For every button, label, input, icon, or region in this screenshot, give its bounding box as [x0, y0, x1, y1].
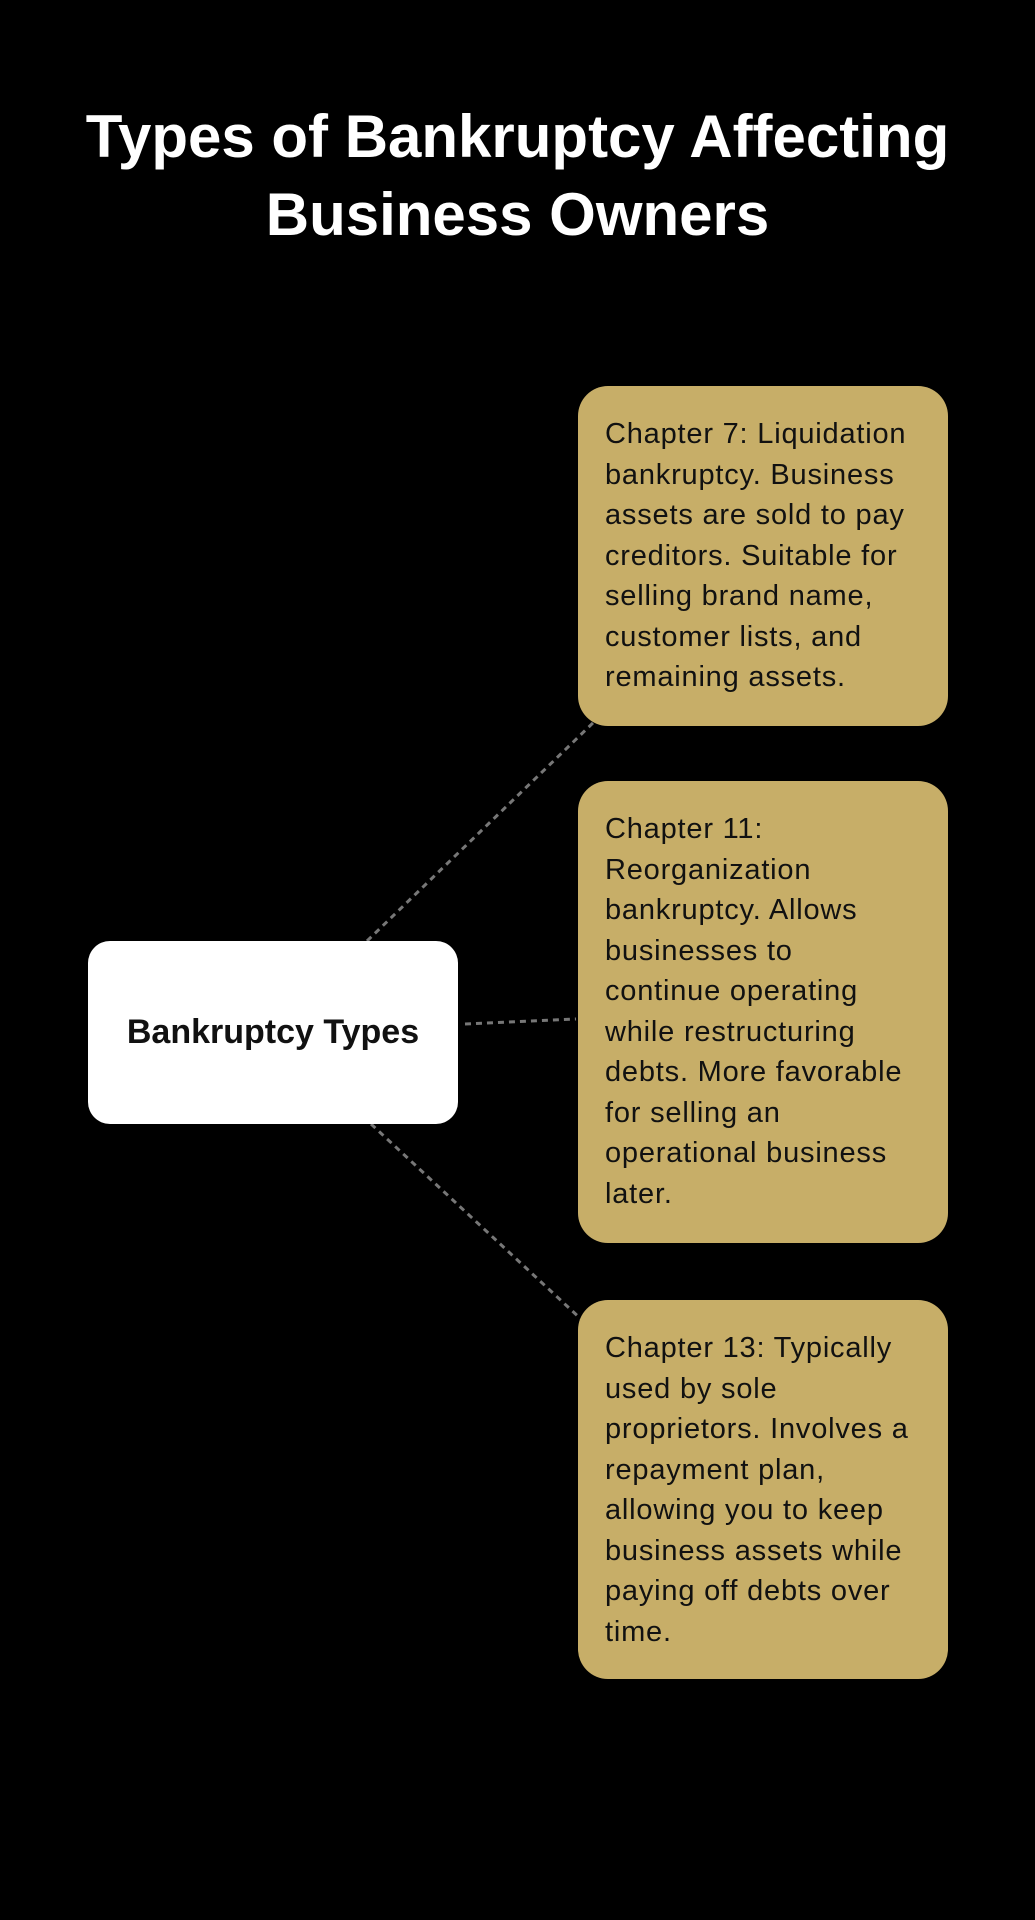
card: Chapter 11: debts. More favorable: [605, 1056, 902, 1088]
card: Chapter 11: businesses to: [605, 934, 793, 966]
card: Chapter 11: operational business: [605, 1137, 887, 1169]
card: Chapter 13: used by sole: [605, 1372, 777, 1404]
card: Chapter 11: bankruptcy. Allows: [605, 894, 857, 926]
card: Chapter 13: time.: [605, 1616, 672, 1648]
card: Chapter 13: allowing you to keep: [605, 1494, 884, 1526]
card: Chapter 13: [578, 1300, 948, 1679]
card: Chapter 7: customer lists, and: [605, 620, 862, 652]
card: Chapter 7: bankruptcy. Business: [605, 458, 894, 490]
card: Chapter 7: remaining assets.: [605, 661, 846, 693]
card: Chapter 13: proprietors. Involves a: [605, 1413, 909, 1445]
card: Chapter 13: repayment plan,: [605, 1454, 825, 1486]
card: Chapter 7: [578, 386, 948, 726]
title: Types of Bankruptcy Affecting: [86, 103, 949, 170]
card: Chapter 11: Chapter 11:: [605, 813, 763, 845]
card: Chapter 13: paying off debts over: [605, 1575, 891, 1607]
title: Business Owners: [266, 181, 769, 248]
title: [86, 103, 949, 248]
card: Chapter 11: Reorganization: [605, 854, 811, 886]
card: Chapter 7: selling brand name,: [605, 580, 873, 612]
card: Chapter 11: continue operating: [605, 975, 858, 1007]
card: Chapter 11: while restructuring: [605, 1016, 856, 1048]
card: Chapter 13: business assets while: [605, 1534, 902, 1566]
card: Chapter 11: [578, 781, 948, 1243]
card: Chapter 11: later.: [605, 1178, 673, 1210]
card: Chapter 7: Chapter 7: Liquidation: [605, 418, 906, 450]
card: Chapter 13: Chapter 13: Typically: [605, 1332, 892, 1364]
card: Chapter 7: creditors. Suitable for: [605, 540, 897, 572]
card: Chapter 11: for selling an: [605, 1096, 781, 1128]
card: Chapter 7: assets are sold to pay: [605, 499, 905, 531]
center node: Bankruptcy Types: Bankruptcy Types: [127, 1013, 419, 1051]
center node: Bankruptcy Types: [88, 941, 458, 1124]
